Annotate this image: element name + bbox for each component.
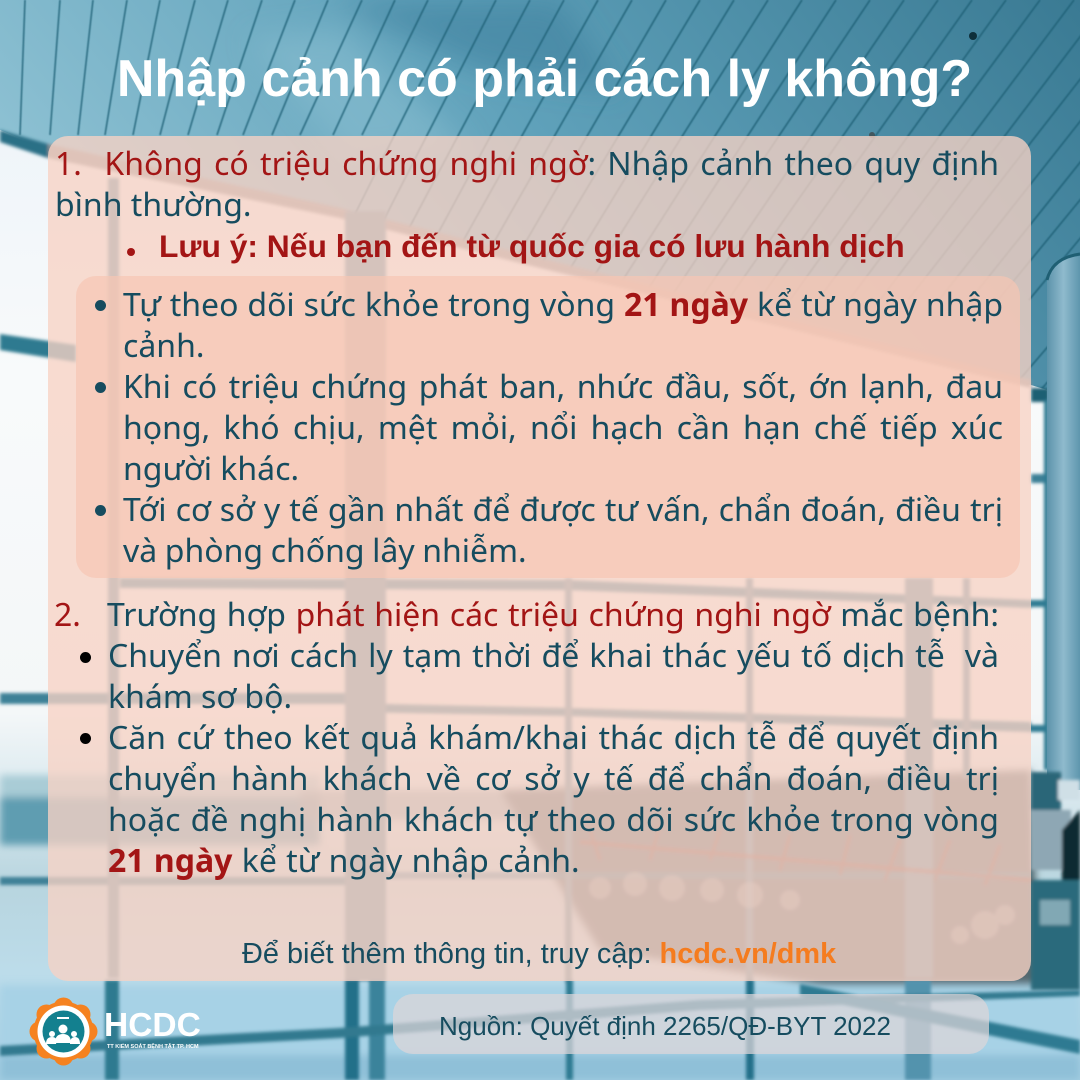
section 2: 2. (54, 593, 81, 636)
section 2: chuyển hành khách về cơ sở y tế để chẩn đoán, điều trị (108, 757, 999, 800)
more information link: Để biết thêm thông tin, truy cập: hcdc.vn/dmk (242, 938, 836, 970)
list: self monitoring advice: họng, khó chịu, mệt mỏi, nổi hạch cần hạn chế tiếp xúc (123, 406, 1003, 449)
title: Nhập cảnh có phải cách ly không? (117, 50, 972, 108)
section 2 (54, 593, 999, 882)
section 2: Căn cứ theo kết quả khám/khai thác dịch tễ để quyết định (108, 716, 999, 759)
list: self monitoring advice (95, 283, 1003, 572)
section 1 heading (55, 142, 999, 226)
chairs (1031, 772, 1080, 990)
section 2: hoặc đề nghị hành khách tự theo dõi sức khỏe trong vòng (108, 798, 999, 841)
section 2: Chuyển nơi cách ly tạm thời để khai thác yếu tố dịch tễ và (108, 634, 999, 677)
list: self monitoring advice: Tự theo dõi sức khỏe trong vòng 21 ngày kể từ ngày nhập (123, 283, 1003, 326)
panel: highlighted advice (76, 276, 1020, 578)
section 2: khám sơ bộ. (108, 675, 292, 718)
ceiling (0, 0, 1080, 400)
icon: HCDC emblem (30, 998, 98, 1066)
seating pattern behind panel (580, 825, 1031, 944)
logo: HCDC (30, 998, 201, 1066)
source box (393, 994, 989, 1054)
column (1047, 256, 1080, 790)
note: travel from affected country: Lưu ý: Nếu bạn đến từ quốc gia có lưu hành dịch (159, 228, 905, 264)
list: self monitoring advice: và phòng chống lây nhiễm. (123, 529, 527, 572)
section 2: 21 ngày kể từ ngày nhập cảnh. (108, 839, 580, 882)
list: self monitoring advice: người khác. (123, 447, 299, 490)
logo subtitle: TT KIỂM SOÁT BỆNH TẬT TP. HCM (107, 1044, 199, 1050)
list: self monitoring advice: Tới cơ sở y tế gần nhất để được tư vấn, chẩn đoán, điều trị (123, 488, 1003, 531)
list: self monitoring advice: cảnh. (123, 324, 204, 367)
list: self monitoring advice: Khi có triệu chứng phát ban, nhức đầu, sốt, ớn lạnh, đau (123, 365, 1003, 408)
section 1 heading: 1. Không có triệu chứng nghi ngờ: Nhập cảnh theo quy định (55, 142, 999, 185)
source box: Nguồn: Quyết định 2265/QĐ-BYT 2022 (439, 1011, 891, 1041)
logo wordmark: HCDC (104, 1007, 201, 1044)
panel: main content (48, 136, 1031, 981)
section 2: Trường hợp phát hiện các triệu chứng nghi ngờ mắc bệnh: (107, 593, 999, 636)
section 1 heading: bình thường. (55, 183, 251, 226)
